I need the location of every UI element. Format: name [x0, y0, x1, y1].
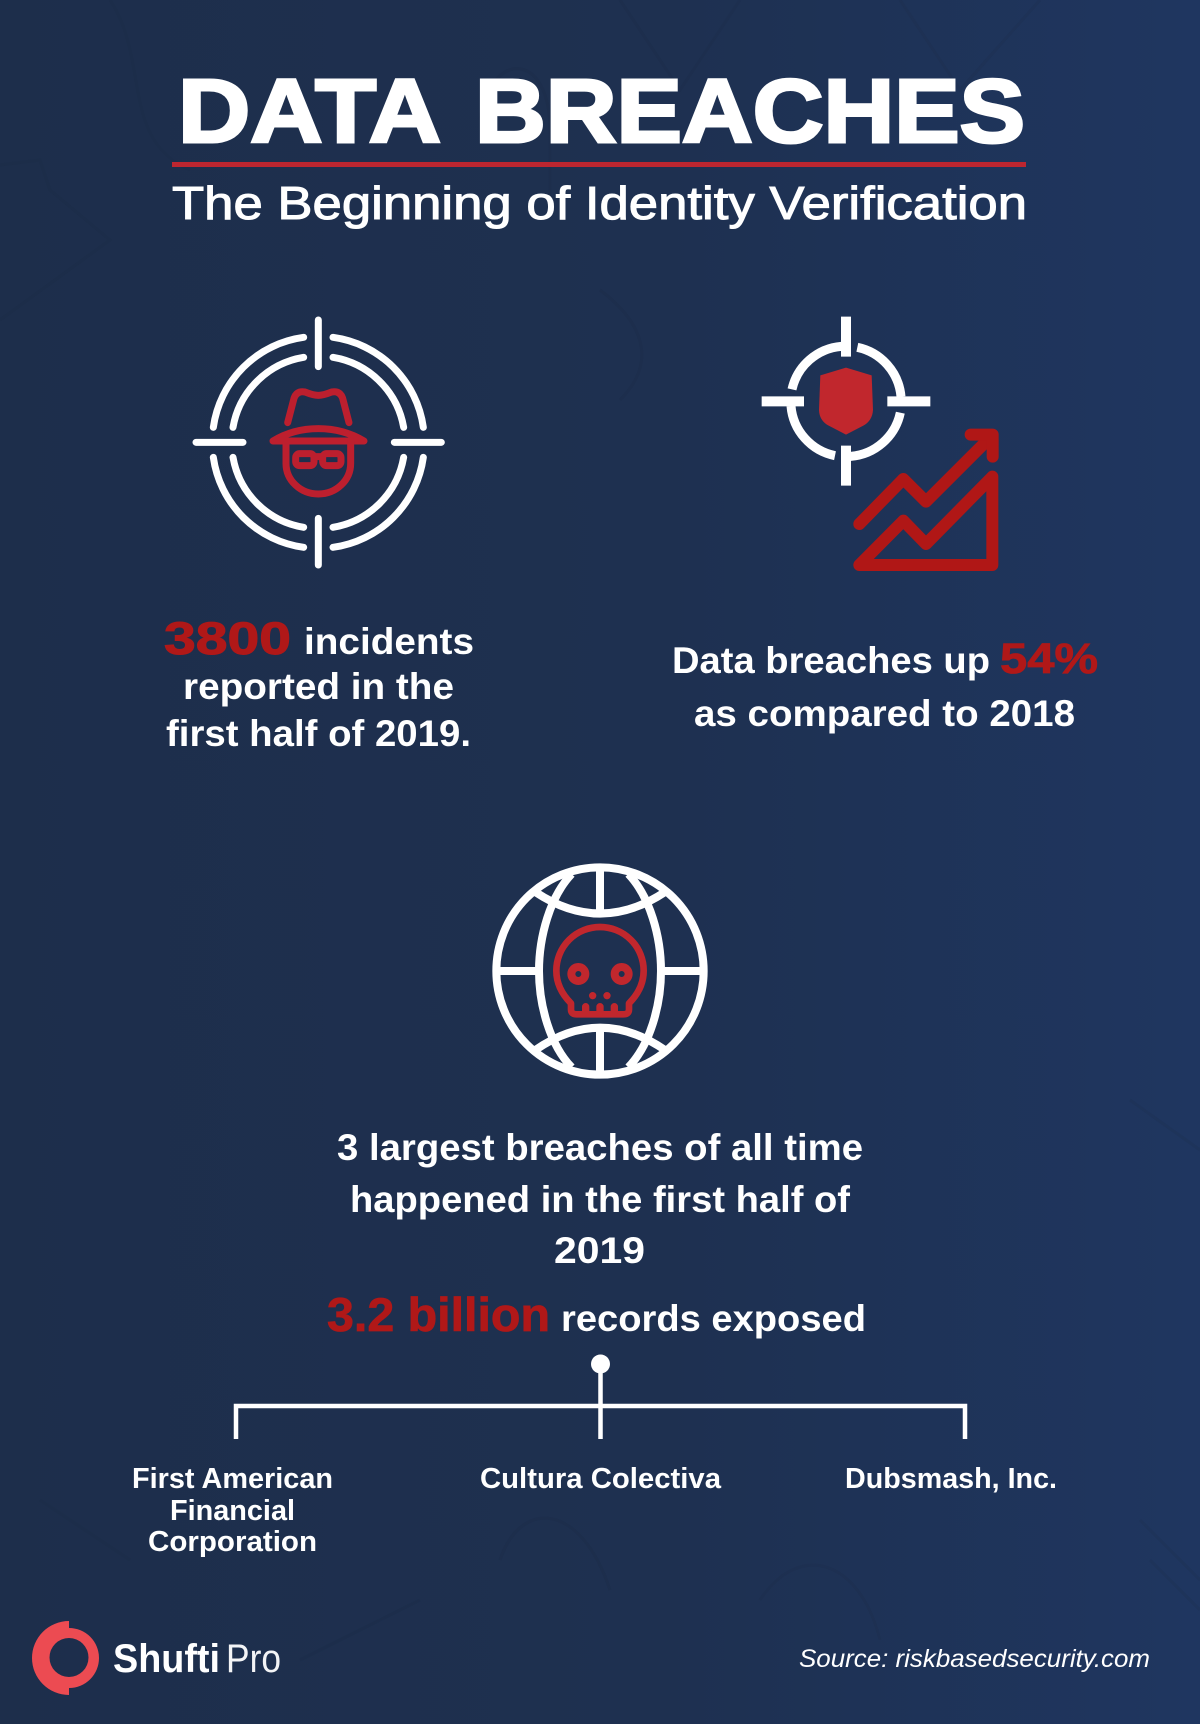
source: Source: riskbasedsecurity.com [799, 1645, 1150, 1673]
logo: Shufti Pro: Pro [226, 1637, 281, 1681]
logo: Shufti Pro: Shufti [113, 1637, 220, 1681]
stat text: 3 largest breaches: happened in the first half of [350, 1179, 851, 1220]
title: BREACHES [475, 62, 1025, 162]
stat text: 3.2 billion records: 3.2 billion [327, 1288, 550, 1341]
stat text: breaches up 54%: Data breaches up [672, 640, 990, 681]
stat text: 3800 incidents: first half of 2019. [166, 713, 471, 754]
stat text: 3800 incidents: 3800 [164, 613, 291, 664]
label: First American Financial Corporation: Financial [170, 1495, 295, 1527]
stat text: 3 largest breaches [337, 1127, 863, 1271]
connector tree [236, 1354, 965, 1439]
icon: shield target with rising chart [762, 317, 993, 565]
label: First American Financial Corporation: Corporation [148, 1526, 317, 1558]
stat text: 3.2 billion records [327, 1288, 866, 1341]
icon: hacker in crosshair [196, 320, 441, 565]
label: First American Financial Corporation [132, 1463, 333, 1558]
label: First American Financial Corporation: First American [132, 1463, 333, 1495]
title [178, 62, 1025, 162]
stat text: 3.2 billion records: records exposed [561, 1298, 866, 1339]
subtitle: The Beginning of Identity Verification [172, 177, 1027, 229]
stat text: 3 largest breaches: 2019 [554, 1230, 645, 1271]
stat text: breaches up 54%: as compared to 2018 [694, 693, 1075, 734]
stat text: 3800 incidents: reported in the [183, 666, 454, 707]
label: Dubsmash, Inc.: Dubsmash, Inc. [845, 1463, 1057, 1495]
stat text: 3 largest breaches: 3 largest breaches of all time [337, 1127, 863, 1168]
stat text: 3800 incidents [164, 613, 474, 754]
stat text: 3800 incidents: incidents [304, 621, 474, 662]
title underline [172, 162, 1026, 167]
icon: globe with skull [496, 867, 704, 1075]
stat text: breaches up 54% [672, 635, 1098, 734]
title: DATA [178, 62, 441, 162]
logo: Shufti Pro [32, 1621, 281, 1695]
label: Cultura Colectiva: Cultura Colectiva [480, 1463, 722, 1495]
stat text: breaches up 54%: 54% [1000, 635, 1098, 683]
